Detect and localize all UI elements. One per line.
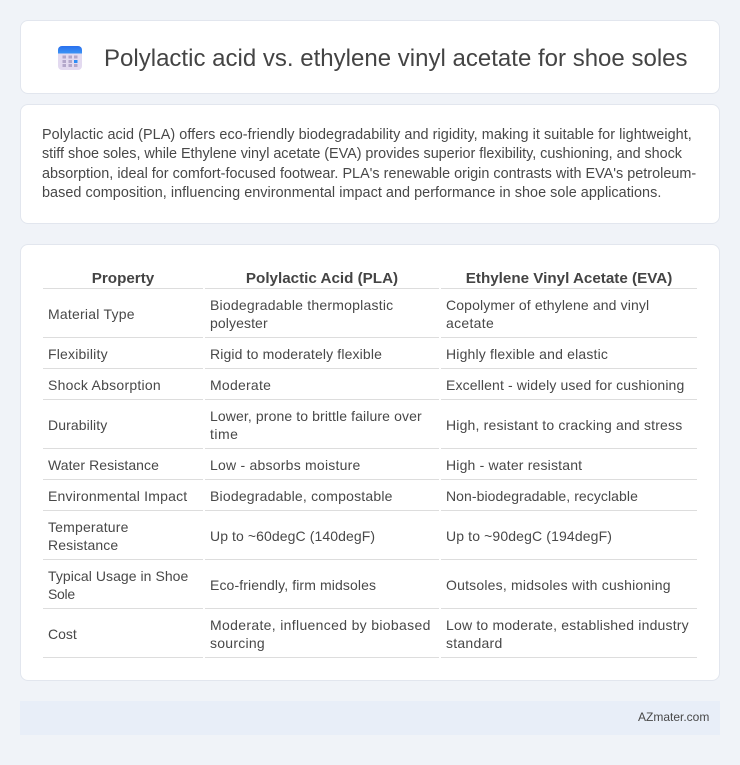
comparison table: polyester [210,315,268,331]
comparison table: Environmental Impact [48,488,187,504]
comparison table: Highly flexible and elastic [446,346,608,362]
comparison table: High, resistant to cracking and stress [446,417,682,433]
comparison table: Cost [48,626,77,642]
comparison table: Non-biodegradable, recyclable [446,488,638,504]
comparison table: Up to ~60degC (140degF) [210,528,375,544]
comparison table: Shock Absorption [48,377,161,393]
comparison table: Lower, prone to brittle failure over [210,408,422,424]
comparison table: High - water resistant [446,457,582,473]
comparison table: standard [446,635,502,651]
comparison table: Polylactic Acid (PLA) [246,270,398,286]
comparison table: Outsoles, midsoles with cushioning [446,577,671,593]
comparison table: Sole [48,586,75,602]
footer credit: AZmater.com [638,710,709,724]
comparison table: Low - absorbs moisture [210,457,361,473]
comparison table: Material Type [48,306,135,322]
comparison table: Eco-friendly, firm midsoles [210,577,376,593]
comparison table: Water Resistance [48,457,159,473]
panel: introduction card [20,104,720,224]
comparison table [43,270,697,658]
comparison table: time [210,426,238,442]
title: Polylactic acid vs. ethylene vinyl acetate for shoe soles [104,45,688,72]
comparison table: Copolymer of ethylene and vinyl [446,297,649,313]
text block: introduction: Polylactic acid (PLA) offers eco-friendly biodegradability and rigidity, making it suitable for lightweight, [42,126,692,142]
comparison table: Property [92,270,154,286]
comparison table: acetate [446,315,494,331]
comparison table: Ethylene Vinyl Acetate (EVA) [466,270,672,286]
text block: introduction: absorption, ideal for comfort-focused footwear. PLA's renewable origin contrasts with EVA's petroleum- [42,166,696,182]
footer bar [20,701,720,735]
panel: comparison table card [20,244,720,681]
comparison table: Up to ~90degC (194degF) [446,528,612,544]
comparison table: Low to moderate, established industry [446,617,689,633]
comparison table: Resistance [48,537,118,553]
icon: calendar [58,46,82,70]
comparison table: Biodegradable, compostable [210,488,393,504]
text block: introduction: based composition, influencing environmental impact and performance in shoe sole applications. [42,185,661,201]
comparison table: Typical Usage in Shoe [48,568,188,584]
comparison table: Temperature [48,519,129,535]
comparison table: Durability [48,417,107,433]
comparison table: Moderate [210,377,271,393]
comparison table: Flexibility [48,346,108,362]
text block: introduction [42,126,696,201]
comparison table: Moderate, influenced by biobased [210,617,431,633]
comparison table: Rigid to moderately flexible [210,346,382,362]
comparison table: Excellent - widely used for cushioning [446,377,684,393]
panel: title card [20,20,720,94]
comparison table: Biodegradable thermoplastic [210,297,393,313]
comparison table: sourcing [210,635,265,651]
text block: introduction: stiff shoe soles, while Ethylene vinyl acetate (EVA) provides superior flexibility, cushioning, and shock [42,146,682,162]
